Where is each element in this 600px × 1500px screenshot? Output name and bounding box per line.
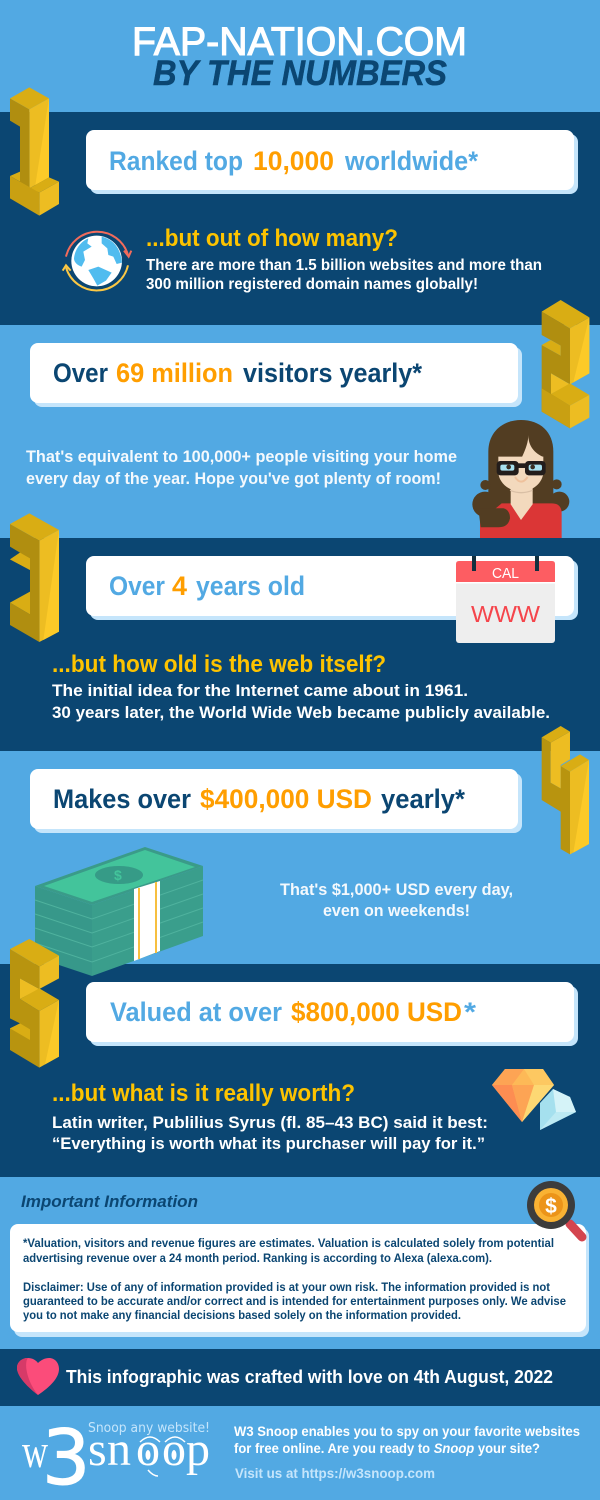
- panel: rank: [0, 112, 600, 325]
- text: what is it really worth: “Everything is worth what its purchaser will pay for it.”: [52, 1135, 485, 1153]
- card: valued at over $800,000: [86, 982, 578, 1046]
- card: 69 million visitors: Over: [53, 358, 108, 388]
- logo: w3snoop: w: [22, 1425, 48, 1478]
- text: revenue explanation: [280, 881, 513, 920]
- card: ranked top 10,000: worldwide*: [344, 146, 478, 176]
- card: over 4 years old: 4: [172, 571, 187, 601]
- subtitle: BY THE NUMBERS: [153, 54, 447, 93]
- card: makes over $400,000: $400,000 USD: [200, 784, 372, 814]
- panel: visitors: [0, 300, 600, 538]
- icon: magnifier with dollar: [527, 1181, 582, 1237]
- text: about w3snoop: Visit us at https://w3snoop.com: [235, 1466, 435, 1481]
- text: what is it really worth: ...but what is it really worth?: [52, 1080, 355, 1107]
- banner: crafted with love: [0, 1349, 600, 1406]
- text: revenue explanation: even on weekends!: [323, 902, 470, 920]
- icon: woman with glasses: [472, 420, 569, 538]
- text: visitors explanation: [26, 448, 457, 488]
- card: disclaimer: Disclaimer: Use of any of information provided is at your own risk. The information provided is not: [23, 1282, 550, 1294]
- card: over 4 years old: Over: [109, 571, 165, 601]
- card: valued at over $800,000: *: [464, 997, 477, 1027]
- card: 69 million visitors: 69 million: [116, 358, 233, 388]
- icon: number 5: [10, 939, 59, 1068]
- text: but out of how many: 300 million registered domain names globally!: [146, 276, 478, 293]
- text: visitors explanation: That's equivalent to 100,000+ people visiting your home: [26, 448, 457, 466]
- card: valued at over $800,000: Valued at over: [110, 997, 282, 1027]
- card: ranked top 10,000: [86, 130, 578, 194]
- icon: number 1: [10, 87, 59, 216]
- header: [0, 0, 600, 112]
- text: about w3snoop: for free online. Are you ready to Snoop your site?: [234, 1441, 540, 1456]
- logo: w3snoop: [22, 1413, 210, 1500]
- icon: calendar www: WWW: [471, 601, 540, 627]
- text: how old is the web: ...but how old is the web itself?: [52, 651, 386, 678]
- card: ranked top 10,000: Ranked top: [109, 146, 243, 176]
- text: what is it really worth: [52, 1080, 488, 1153]
- card: disclaimer: [10, 1224, 589, 1337]
- card: disclaimer: advertising revenue over a 24 month period. Ranking is according to Alexa (alexa.com).: [23, 1253, 492, 1265]
- icon: calendar www: CAL: [492, 565, 519, 582]
- card: ranked top 10,000: 10,000: [253, 146, 334, 176]
- panel: age: [0, 513, 600, 751]
- panel: value: [0, 964, 600, 1177]
- icon: number 3: [10, 513, 59, 642]
- card: 69 million visitors: [30, 343, 522, 407]
- icon: heart: [17, 1358, 59, 1395]
- card: makes over $400,000: yearly*: [381, 784, 465, 814]
- text: but out of how many: There are more than 1.5 billion websites and more than: [146, 257, 542, 274]
- icon: number 4: [542, 726, 589, 854]
- card: valued at over $800,000: $800,000 USD: [291, 997, 462, 1027]
- text: how old is the web: 30 years later, the World Wide Web became publicly available.: [52, 704, 550, 722]
- panel: important information: [0, 1177, 600, 1349]
- icon: magnifier with dollar: $: [545, 1195, 557, 1218]
- card: disclaimer: guaranteed to be accurate and/or correct and is intended for entertainment purposes only. We advise: [23, 1296, 566, 1308]
- icon: calendar www: [456, 556, 555, 643]
- heading: important information: Important Information: [21, 1192, 198, 1211]
- icon: stack of money: [35, 847, 203, 976]
- panel: revenue: [0, 726, 600, 964]
- text: about w3snoop: W3 Snoop enables you to spy on your favorite websites: [234, 1424, 580, 1439]
- card: disclaimer: you to not make any financial decisions based solely on the information provided.: [23, 1310, 461, 1322]
- logo: w3snoop: Snoop any website!: [88, 1421, 210, 1436]
- text: what is it really worth: Latin writer, Publilius Syrus (fl. 85–43 BC) said it best:: [52, 1114, 488, 1132]
- text: revenue explanation: That's $1,000+ USD every day,: [280, 881, 513, 899]
- text: about w3snoop: [234, 1424, 580, 1481]
- text: but out of how many: [146, 225, 542, 293]
- title: FAP-NATION.COM: [132, 20, 467, 64]
- card: 69 million visitors: visitors yearly*: [243, 358, 422, 388]
- icon: stack of money: $: [114, 867, 122, 883]
- icon: number 2: [542, 300, 589, 428]
- text: crafted date: This infographic was crafted with love on 4th August, 2022: [66, 1367, 553, 1387]
- text: visitors explanation: every day of the year. Hope you've got plenty of room!: [26, 470, 441, 488]
- footer: [0, 1406, 600, 1500]
- logo: w3snoop: snoop: [88, 1423, 210, 1476]
- icon: globe with arrows: [63, 232, 131, 290]
- text: how old is the web: [52, 651, 550, 722]
- card: makes over $400,000: Makes over: [53, 784, 191, 814]
- text: but out of how many: ...but out of how many?: [146, 225, 398, 252]
- card: disclaimer: *Valuation, visitors and revenue figures are estimates. Valuation is calculated solely from potential: [23, 1238, 554, 1250]
- logo: w3snoop: 3: [42, 1413, 90, 1500]
- card: makes over $400,000: [30, 769, 522, 833]
- icon: diamonds: [492, 1069, 576, 1130]
- text: how old is the web: The initial idea for the Internet came about in 1961.: [52, 682, 468, 700]
- card: over 4 years old: years old: [196, 571, 305, 601]
- card: over 4 years old: [86, 556, 578, 620]
